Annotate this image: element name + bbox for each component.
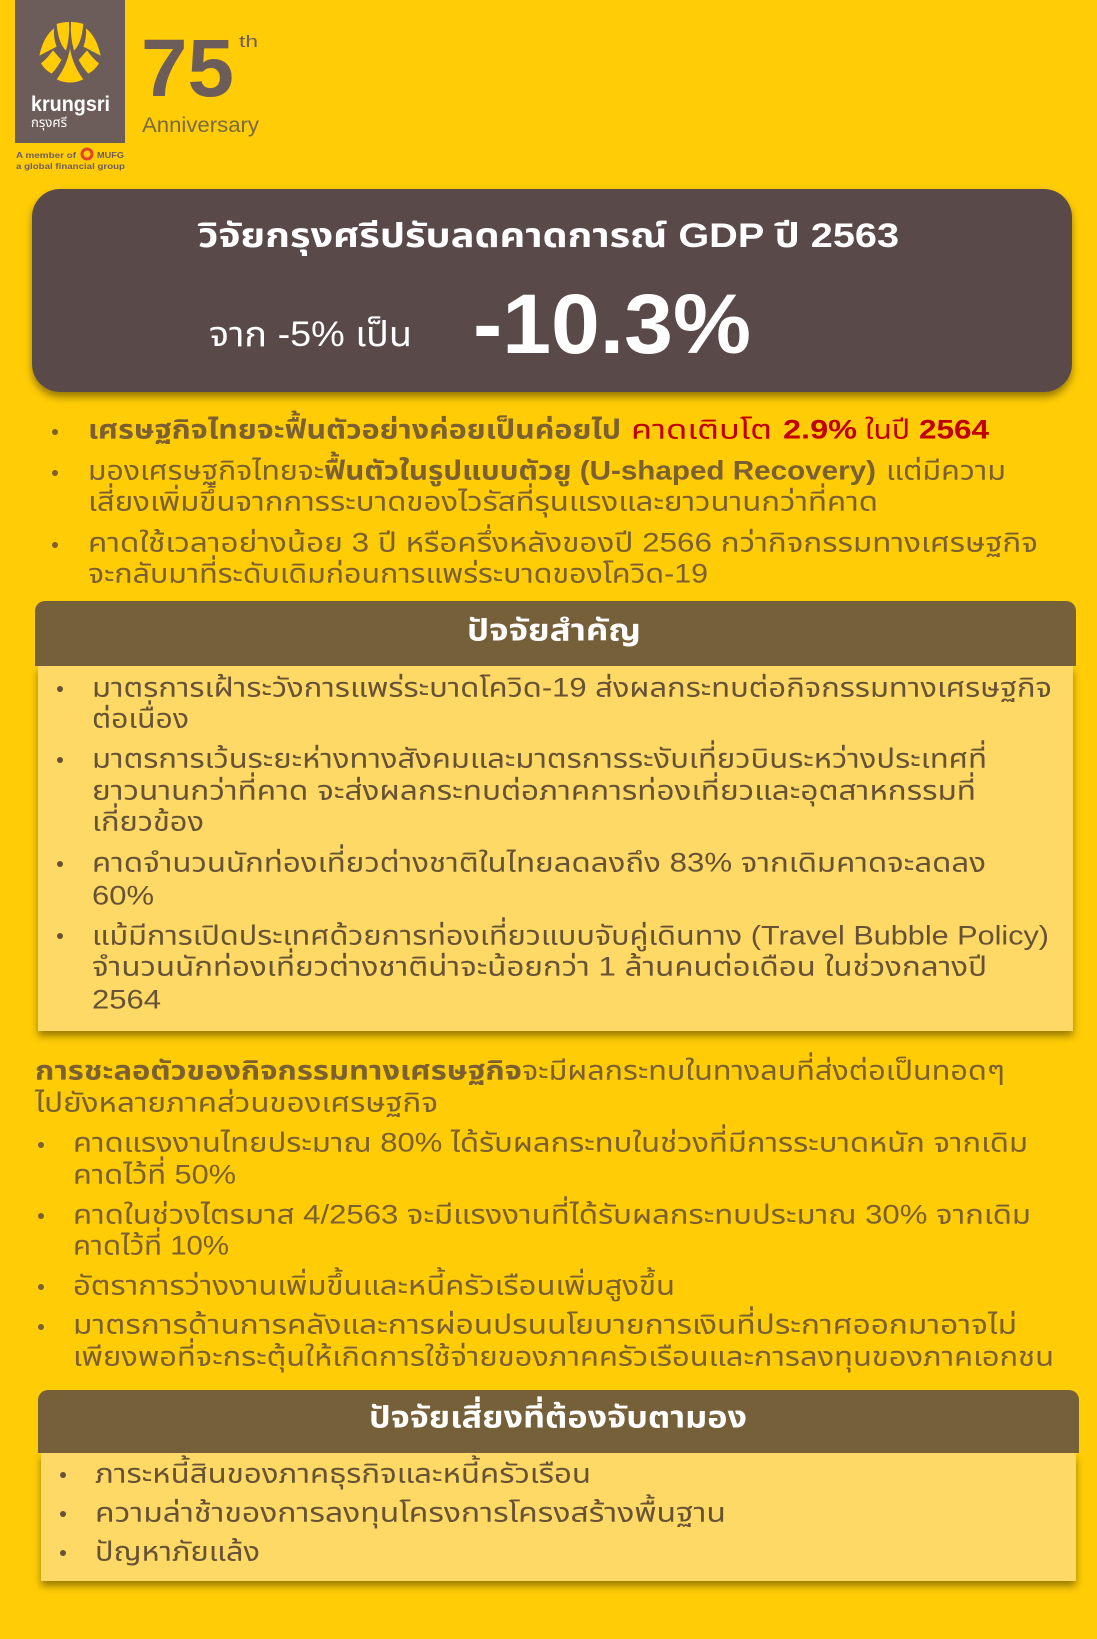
panel: key factors: เกี่ยวข้อง [92, 802, 204, 836]
panel: key factors: มาตรการเฝ้าระวังการแพร่ระบาดโควิด-19 ส่งผลกระทบต่อกิจกรรมทางเศรษฐกิจ [92, 672, 1052, 702]
text block: outlook bullets: จะกลับมาที่ระดับเดิมก่อนการแพร่ระบาดของโควิด-19 [88, 554, 708, 588]
logo: krungsri: MUFG [97, 150, 124, 160]
text block: outlook bullets: คาดใช้เวลาอย่างน้อย 3 ปี หรือครึ่งหลังของปี 2566 กว่ากิจกรรมทางเศรษฐกิจ [88, 524, 1038, 558]
text block: economic slowdown: การชะลอตัวของกิจกรรมทางเศรษฐกิจ [35, 1056, 522, 1086]
75th anniversary mark [141, 23, 260, 137]
panel: key factors: ต่อเนื่อง [92, 700, 189, 734]
heading: key factors: ปัจจัยสำคัญ [467, 614, 641, 648]
text block: economic slowdown: คาดไว้ที่ 10% [73, 1226, 229, 1260]
75th anniversary mark: 75 [141, 23, 234, 114]
panel: key factors: จำนวนนักท่องเที่ยวต่างชาติน่าจะน้อยกว่า 1 ล้านคนต่อเดือน ในช่วงกลางปี [92, 948, 987, 982]
subtitle: from -5% to: จาก -5% เป็น [209, 315, 412, 354]
panel: key factors: มาตรการเว้นระยะห่างทางสังคมและมาตรการระงับเที่ยวบินระหว่างประเทศที่ [92, 740, 987, 774]
text block: outlook bullets: 2564 [919, 414, 989, 444]
logo: krungsri: a global financial group [16, 161, 125, 171]
75th anniversary mark: Anniversary [142, 114, 260, 137]
text block: economic slowdown: คาดในช่วงไตรมาส 4/2563 จะมีแรงงานที่ได้รับผลกระทบประมาณ 30% จากเดิม [73, 1196, 1031, 1230]
75th anniversary mark: th [239, 32, 258, 51]
panel: key factors [35, 601, 1076, 1031]
text block: economic slowdown: คาดไว้ที่ 50% [73, 1156, 236, 1190]
text block: economic slowdown [34, 1052, 1054, 1372]
panel: risk factors: ปัญหาภัยแล้ง [95, 1536, 260, 1566]
text block: outlook bullets: เศรษฐกิจไทยจะฟื้นตัวอย่างค่อยเป็นค่อยไป [88, 410, 621, 444]
key figure: -10.3% [473, 277, 751, 371]
panel: headline forecast [32, 189, 1072, 392]
text block: outlook bullets: ในปี [865, 414, 910, 444]
text block: outlook bullets: 2.9% [783, 414, 857, 444]
panel: risk factors [38, 1390, 1079, 1581]
logo: krungsri: กรุงศรี [31, 115, 67, 130]
panel: key factors: แม้มีการเปิดประเทศด้วยการท่องเที่ยวแบบจับคู่เดินทาง (Travel Bubble Policy) [92, 916, 1049, 952]
text block: outlook bullets: คาดเติบโต [631, 414, 772, 444]
title: วิจัยกรุงศรีปรับลดคาดการณ์ GDP ปี 2563 [197, 217, 899, 256]
panel: key factors: คาดจำนวนนักท่องเที่ยวต่างชาติในไทยลดลงถึง 83% จากเดิมคาดจะลดลง [92, 844, 986, 878]
panel: risk factors: ความล่าช้าของการลงทุนโครงการโครงสร้างพื้นฐาน [95, 1494, 726, 1528]
panel: key factors: 60% [92, 880, 154, 910]
text block: economic slowdown: อัตราการว่างงานเพิ่มขึ้นและหนี้ครัวเรือนเพิ่มสูงขึ้น [73, 1266, 675, 1302]
text block: outlook bullets: มองเศรษฐกิจไทยจะ [88, 456, 324, 486]
text block: economic slowdown: คาดแรงงานไทยประมาณ 80% ได้รับผลกระทบในช่วงที่มีการระบาดหนัก จากเดิม [73, 1124, 1028, 1158]
panel: key factors: 2564 [92, 984, 161, 1014]
text block: outlook bullets: แต่มีความ [886, 456, 1006, 486]
logo: krungsri: krungsri [31, 93, 110, 116]
heading: risk factors: ปัจจัยเสี่ยงที่ต้องจับตามอง [369, 1395, 747, 1434]
text block: economic slowdown: จะมีผลกระทบในทางลบที่ส่งต่อเป็นทอดๆ [522, 1052, 1005, 1086]
text block: economic slowdown: เพียงพอที่จะกระตุ้นให้เกิดการใช้จ่ายของภาคครัวเรือนและการลงทุนของภาคเอกชน [73, 1338, 1054, 1372]
text block: outlook bullets: เสี่ยงเพิ่มขึ้นจากการระบาดของไวรัสที่รุนแรงและยาวนานกว่าที่คาด [88, 482, 878, 518]
logo: krungsri: A member of [16, 150, 76, 160]
panel: key factors: ยาวนานกว่าที่คาด จะส่งผลกระทบต่อภาคการท่องเที่ยวและอุตสาหกรรมที่ [92, 772, 976, 806]
text block: economic slowdown: มาตรการด้านการคลังและการผ่อนปรนนโยบายการเงินที่ประกาศออกมาอาจไม่ [73, 1306, 1017, 1340]
text block: outlook bullets: ฟื้นตัวในรูปแบบตัวยู (U-shaped Recovery) [324, 452, 876, 486]
panel: risk factors: ภาระหนี้สินของภาคธุรกิจและหนี้ครัวเรือน [95, 1454, 591, 1490]
text block: economic slowdown: ไปยังหลายภาคส่วนของเศรษฐกิจ [34, 1088, 438, 1118]
text block: outlook bullets [52, 410, 1038, 588]
logo: krungsri [15, 0, 125, 171]
